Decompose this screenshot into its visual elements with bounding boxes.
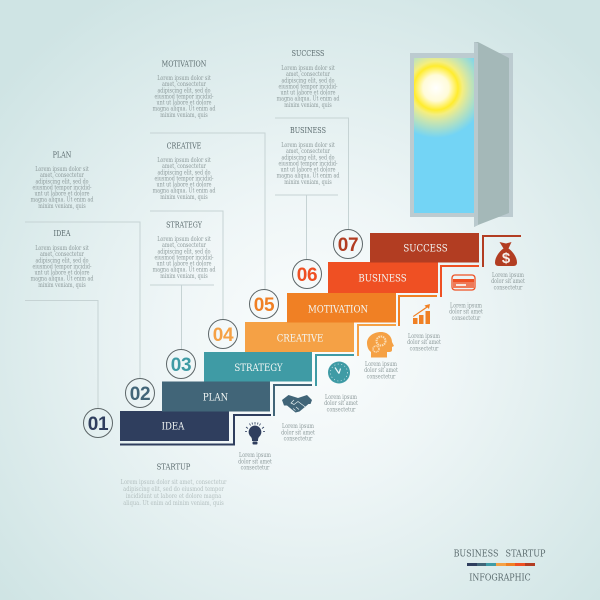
caption: clock: consectetur [327,407,356,414]
panel: startup text: incididunt ut labore et dolore magna [126,494,222,500]
panel: motivation text: minim veniam, quis [160,113,208,119]
panel: success text: amet, consectetur [286,72,330,78]
panel: business text: magna aliqua. Ut enim ad [277,173,340,180]
panel: plan text [31,150,94,210]
panel: business text: amet, consectetur [286,149,330,155]
step: success: SUCCESS [403,243,448,255]
panel: startup text: aliqua. Ut enim ad minim veniam, quis [123,501,224,507]
panel: startup text [121,462,227,507]
caption: money bag: consectetur [494,285,523,292]
panel: strategy text: Lorem ipsum dolor sit [157,237,211,243]
panel: creative text: CREATIVE [167,141,201,151]
number badge 02: 02 [130,384,150,405]
panel: business text [277,125,340,186]
panel: motivation text [153,59,216,119]
step: idea [120,411,229,441]
step: plan [162,382,270,412]
connector lines [25,118,348,408]
panel: creative text: minim veniam, quis [160,195,208,201]
panel: idea text: eiusmod tempor incidid- [32,264,92,271]
panel: motivation text: eiusmod tempor incidid- [154,94,214,101]
icon: clock [328,362,350,384]
icon: head with gears [367,332,394,358]
icon: money bag [495,242,517,267]
step: idea: IDEA [162,421,185,433]
panel: strategy text: amet, consectetur [162,243,206,249]
icon: handshake [282,395,312,412]
number badge 04 [208,320,238,348]
panel: plan text: amet, consectetur [40,173,84,179]
caption: clock: dolor sit amet [324,401,359,407]
panel: idea text: adipiscing elit, sed do [35,258,89,265]
door and window [410,42,513,227]
caption: card [449,303,484,322]
step outlines [120,236,521,444]
caption: money bag: Lorem ipsum [492,273,524,279]
panel: startup text: STARTUP [157,462,190,472]
caption: handshake: Lorem ipsum [282,424,314,430]
caption: handshake: dolor sit amet [281,430,316,437]
caption: handshake [281,424,316,443]
panel: success text: magna aliqua. Ut enim ad [277,96,340,103]
panel: business text: adipiscing elit, sed do [281,155,335,162]
panel: success text: adipiscing elit, sed do [281,78,335,85]
caption: bulb: dolor sit amet [238,459,273,466]
panel: creative text: unt ut labore et dolore [157,182,211,189]
caption: head: Lorem ipsum [365,362,397,368]
panel: business text: eiusmod tempor incidid- [278,161,338,168]
caption: card: consectetur [452,316,481,322]
caption: chart [407,334,442,353]
number badge 05 [250,290,278,318]
number badge 04: 04 [213,325,234,346]
caption: head: consectetur [367,374,396,381]
footer title: STARTUP [506,549,546,560]
caption: head [364,362,399,381]
step: business: BUSINESS [358,273,407,285]
step: strategy: STRATEGY [234,362,283,374]
panel: business text: Lorem ipsum dolor sit [281,143,335,149]
step: success [370,233,479,262]
panel: business text: BUSINESS [290,125,326,135]
panel: success text [277,48,340,109]
panel: success text: minim veniam, quis [284,103,332,109]
step: motivation [287,293,396,322]
step: business [328,262,438,293]
step: strategy [204,352,312,382]
panel: plan text: eiusmod tempor incidid- [32,185,92,192]
step: plan: PLAN [203,392,228,404]
panel: motivation text: adipiscing elit, sed do [157,88,211,95]
panel: business text: minim veniam, quis [284,180,332,186]
panel: plan text: unt ut labore et dolore [35,191,89,198]
caption: chart: dolor sit amet [407,340,442,346]
icon: light bulb [245,422,265,444]
panel: motivation text: MOTIVATION [162,59,207,69]
panel: startup text: Lorem ipsum dolor sit amet, consectetur [121,480,227,486]
caption: bulb [238,453,273,472]
panel: strategy text: minim veniam, quis [160,274,208,280]
panel: motivation text: amet, consectetur [162,82,206,88]
number badge 03 [166,350,196,378]
panel: strategy text: magna aliqua. Ut enim ad [153,267,216,274]
panel: creative text: Lorem ipsum dolor sit [157,158,211,164]
number badge 01: 01 [88,414,109,435]
panel: strategy text [153,220,216,280]
caption: clock [324,395,359,414]
number badge 06 [292,260,322,288]
step: creative: CREATIVE [277,333,323,345]
number badge 01 [84,408,112,438]
caption: card: Lorem ipsum [450,303,482,310]
caption: bulb: consectetur [241,465,270,472]
number badge 05: 05 [254,295,275,316]
caption: money bag [491,273,526,292]
number badge 07 [334,230,362,258]
icon: growth chart [413,304,430,324]
panel: strategy text: adipiscing elit, sed do [157,249,211,256]
panel: motivation text: unt ut labore et dolore [157,100,211,107]
panel: success text: unt ut labore et dolore [281,90,335,97]
panel: idea text: amet, consectetur [40,252,84,258]
caption: clock: Lorem ipsum [325,395,357,401]
footer title: BUSINESS [454,549,499,560]
panel: motivation text: magna aliqua. Ut enim ad [153,106,216,113]
panel: success text: Lorem ipsum dolor sit [281,66,335,72]
panel: creative text: amet, consectetur [162,164,206,170]
caption: bulb: Lorem ipsum [239,453,271,459]
caption: handshake: consectetur [284,436,313,443]
panel: creative text [153,141,216,201]
panel: idea text: IDEA [54,228,71,238]
panel: creative text: eiusmod tempor incidid- [154,176,214,183]
panel: plan text: adipiscing elit, sed do [35,179,89,186]
panel: plan text: Lorem ipsum dolor sit [35,167,89,173]
panel: plan text: magna aliqua. Ut enim ad [31,197,94,204]
panel: strategy text: STRATEGY [166,220,202,230]
number badge 03: 03 [171,355,191,376]
caption: chart: Lorem ipsum [408,334,440,340]
step: motivation: MOTIVATION [308,304,368,316]
panel: startup text: adipiscing elit, sed do eiusmod tempor [123,487,224,493]
panel: strategy text: eiusmod tempor incidid- [154,255,214,262]
panel: idea text: magna aliqua. Ut enim ad [31,276,94,283]
panel: idea text: minim veniam, quis [38,283,86,289]
panel: plan text: PLAN [53,150,72,160]
caption: money bag: dolor sit amet [491,279,526,285]
panel: success text: SUCCESS [292,48,324,58]
footer title: INFOGRAPHIC [469,573,531,584]
caption: chart: consectetur [410,346,439,353]
number badge 06: 06 [297,265,317,286]
step: creative [245,322,354,352]
panel: strategy text: unt ut labore et dolore [157,261,211,268]
panel: motivation text: Lorem ipsum dolor sit [157,76,211,82]
number badge 02 [126,378,154,408]
icon: credit card [452,275,475,290]
panel: idea text [31,228,94,289]
panel: business text: unt ut labore et dolore [281,167,335,174]
panel: creative text: magna aliqua. Ut enim ad [153,188,216,195]
panel: creative text: adipiscing elit, sed do [157,170,211,177]
panel: plan text: minim veniam, quis [38,204,86,210]
panel: idea text: Lorem ipsum dolor sit [35,246,89,252]
icon: money bag: $ [502,250,511,267]
caption: head: dolor sit amet [364,368,399,374]
panel: success text: eiusmod tempor incidid- [278,84,338,91]
panel: idea text: unt ut labore et dolore [35,270,89,277]
number badge 07: 07 [338,235,358,256]
footer title [454,549,546,584]
caption: card: dolor sit amet [449,309,484,316]
